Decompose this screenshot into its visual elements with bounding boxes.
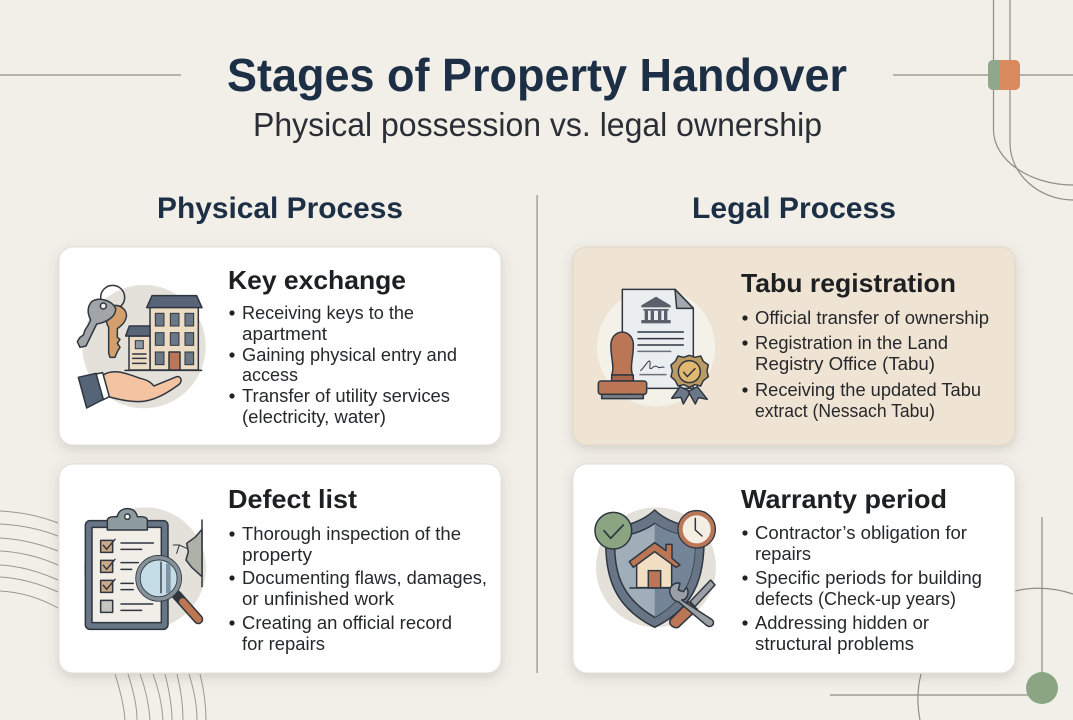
bullet list: tabu registration: Registry Office (Tabu)	[755, 353, 935, 374]
bullet list: key exchange: Transfer of utility services	[242, 385, 450, 406]
accent circle	[1026, 672, 1058, 704]
bullet list: defect list: Thorough inspection of the	[242, 523, 461, 544]
bullet list: warranty period: Addressing hidden or	[755, 612, 929, 633]
bullet list: defect list: Documenting flaws, damages,	[242, 567, 487, 588]
subtitle: Physical possession vs. legal ownership	[253, 106, 822, 143]
bullet list: tabu registration: Official transfer of ownership	[755, 307, 989, 328]
bullet list: defect list: Creating an official record	[242, 612, 452, 633]
bullet list: warranty period	[742, 522, 982, 654]
title: Stages of Property Handover	[227, 49, 847, 101]
panel: key exchange	[59, 247, 501, 445]
bullet list: defect list: or unfinished work	[242, 588, 395, 609]
bullet list: key exchange: apartment	[242, 323, 327, 344]
bullet list: key exchange: Receiving keys to the	[242, 302, 414, 323]
bullet list: warranty period: structural problems	[755, 633, 914, 654]
panel: tabu registration	[573, 247, 1015, 445]
bullet list: defect list: property	[242, 544, 313, 565]
bullet list: key exchange: Gaining physical entry and	[242, 344, 457, 365]
heading: physical process: Physical Process	[157, 192, 403, 225]
bullet list: key exchange	[229, 302, 457, 427]
icon: clipboard and magnifier	[84, 507, 206, 629]
heading: tabu registration: Tabu registration	[741, 268, 956, 298]
bullet list: warranty period: defects (Check-up years)	[755, 588, 956, 609]
bullet list: defect list	[229, 523, 487, 654]
bullet list: warranty period: Contractor’s obligation for	[755, 522, 967, 543]
icon: deed, stamp and seal	[597, 288, 715, 406]
bullet list: defect list: for repairs	[242, 633, 325, 654]
bullet list: tabu registration: extract (Nessach Tabu)	[755, 400, 935, 421]
bullet list: warranty period: Specific periods for building	[755, 567, 982, 588]
bullet list: key exchange: (electricity, water)	[242, 406, 386, 427]
icon: shield, house and tools	[595, 507, 716, 628]
bullet list: tabu registration: Receiving the updated Tabu	[755, 379, 981, 400]
icon: keys, building and hand	[77, 285, 206, 408]
bullet list: tabu registration: Registration in the Land	[755, 332, 948, 353]
accent square	[988, 60, 1020, 90]
heading: legal process: Legal Process	[692, 192, 896, 225]
bullet list: warranty period: repairs	[755, 543, 811, 564]
heading: warranty period: Warranty period	[741, 484, 947, 514]
heading: defect list: Defect list	[228, 484, 357, 514]
panel: defect list	[59, 464, 501, 673]
panel: warranty period	[573, 464, 1015, 673]
heading: key exchange: Key exchange	[228, 265, 406, 295]
bullet list: key exchange: access	[242, 364, 298, 385]
bullet list: tabu registration	[742, 307, 989, 421]
